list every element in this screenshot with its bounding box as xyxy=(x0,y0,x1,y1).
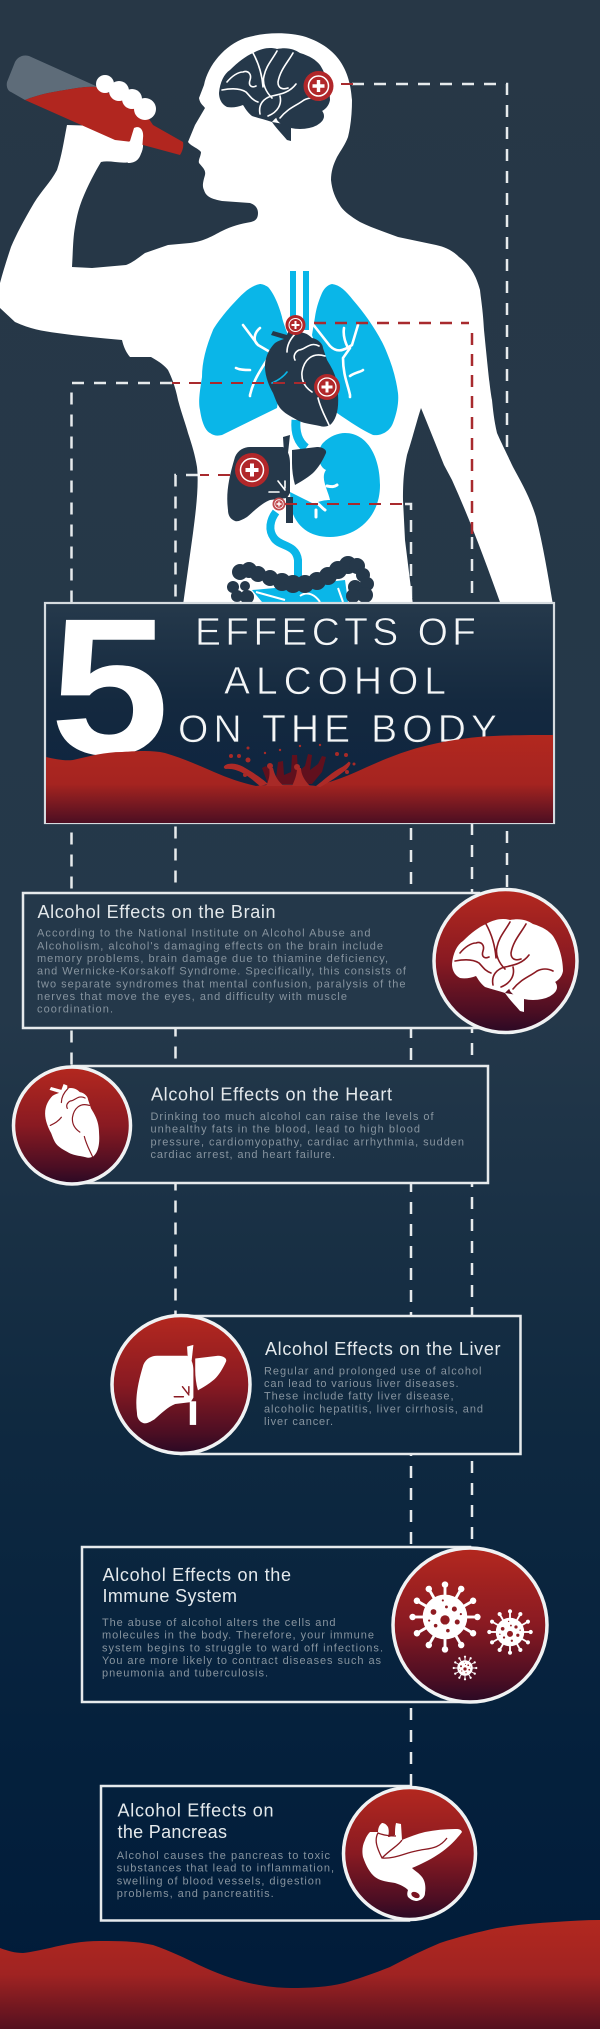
icon: heart xyxy=(14,1067,130,1184)
icon: brain xyxy=(434,890,577,1032)
body text: You are more likely to contract diseases such as xyxy=(102,1655,382,1667)
panel: liver effects xyxy=(112,1316,520,1454)
dashed connector: brain xyxy=(352,84,507,888)
heading xyxy=(118,1801,274,1842)
red connector: brain xyxy=(341,83,353,85)
red connector: pancreas xyxy=(285,503,405,505)
body text: memory problems, brain damage due to thiamine deficiency, xyxy=(37,953,388,965)
body text xyxy=(102,1617,383,1680)
marker: heart lower xyxy=(314,374,340,400)
lung bronchi xyxy=(236,323,363,397)
dashed connector: heart xyxy=(72,383,172,1066)
body text: problems, and pancreatitis. xyxy=(117,1888,274,1900)
body text: nerves that move the eyes, and difficulty with muscle xyxy=(37,991,347,1003)
illustration: person drinking xyxy=(0,33,553,605)
panel: title xyxy=(45,578,554,823)
panel: pancreas effects xyxy=(101,1786,476,1920)
body silhouette xyxy=(0,33,553,605)
body text xyxy=(117,1850,334,1900)
dashed connector: immune system xyxy=(471,537,473,1547)
heading: Alcohol Effects on the Liver xyxy=(265,1339,500,1359)
stomach folds xyxy=(316,485,337,517)
organ: heart xyxy=(265,327,338,427)
panel: immune system effects xyxy=(82,1547,547,1702)
footer red wave xyxy=(0,1920,600,2029)
body text: Alcoholism, alcohol's damaging effects on the brain include xyxy=(37,940,383,952)
small intestine xyxy=(252,580,348,602)
heading line 1: EFFECTS OF xyxy=(195,611,476,654)
body text: substances that lead to inflammation, xyxy=(117,1863,334,1875)
heading: Alcohol Effects on the xyxy=(102,1565,291,1585)
red connector: immune system xyxy=(314,323,472,537)
red connector: heart xyxy=(172,382,306,384)
heading: Alcohol Effects on the Brain xyxy=(38,902,276,922)
body text: pneumonia and tuberculosis. xyxy=(102,1668,268,1680)
body text: The abuse of alcohol alters the cells and xyxy=(102,1617,336,1629)
marker: pancreas xyxy=(272,498,286,510)
body text xyxy=(264,1365,483,1428)
heading xyxy=(102,1565,291,1606)
organ: duodenum xyxy=(270,512,298,582)
hand: thumb xyxy=(118,127,143,163)
body text: Alcohol causes the pancreas to toxic xyxy=(117,1850,330,1862)
marker: heart upper xyxy=(286,315,306,335)
bottle: red liquid xyxy=(25,87,183,155)
body text: two separate syndromes that mental confusion, paralysis of the xyxy=(37,978,406,990)
organ: intestines xyxy=(227,556,374,604)
marker: brain xyxy=(304,71,334,101)
body text: swelling of blood vessels, digestion xyxy=(117,1875,321,1887)
organ: lungs xyxy=(199,271,398,436)
marker: liver xyxy=(235,453,269,487)
red liquid wave xyxy=(46,735,553,823)
heading: Alcohol Effects on xyxy=(118,1801,274,1821)
organ: liver xyxy=(227,435,326,523)
body text: alcoholic hepatitis, liver cirrhosis, and xyxy=(264,1403,483,1415)
colon xyxy=(227,556,374,604)
organ: esophagus xyxy=(296,420,306,448)
bottle: empty glass xyxy=(7,55,98,100)
organ: brain xyxy=(219,48,330,141)
body text: liver cancer. xyxy=(264,1416,333,1428)
heading: Alcohol Effects on the Heart xyxy=(151,1085,392,1105)
icon: liver xyxy=(112,1316,250,1454)
icon: viruses xyxy=(393,1548,547,1702)
body text: cardiac arrest, and heart failure. xyxy=(150,1149,335,1161)
body text: unhealthy fats in the blood, lead to high blood xyxy=(150,1124,420,1136)
heading line 2: ALCOHOL xyxy=(224,660,446,703)
heading: the Pancreas xyxy=(118,1822,227,1842)
dashed connector: liver xyxy=(176,475,198,1314)
panel: brain effects xyxy=(23,890,577,1032)
body text: Regular and prolonged use of alcohol xyxy=(264,1365,482,1377)
body text: coordination. xyxy=(37,1004,113,1016)
body text: Drinking too much alcohol can raise the levels of xyxy=(150,1111,434,1123)
body text xyxy=(37,928,407,1016)
body text: system begins to struggle to ward off infections. xyxy=(102,1642,383,1654)
panel: heart effects xyxy=(14,1066,488,1184)
body text: and Wernicke-Korsakoff Syndrome. Specifically, this consists of xyxy=(37,966,407,978)
body text: pressure, cardiomyopathy, cardiac arrhythmia, sudden xyxy=(150,1136,464,1148)
body text: can lead to various liver diseases. xyxy=(264,1378,458,1390)
hand: fingers xyxy=(96,75,156,120)
body text: According to the National Institute on Alcohol Abuse and xyxy=(37,928,371,940)
organ: stomach xyxy=(290,433,380,537)
dashed connector: pancreas xyxy=(405,504,411,1786)
icon: pancreas xyxy=(344,1788,476,1920)
heading: Immune System xyxy=(102,1586,237,1606)
body text xyxy=(150,1111,464,1161)
heading line 3: ON THE BODY xyxy=(178,708,497,751)
red connector: liver xyxy=(200,474,230,476)
body text: molecules in the body. Therefore, your immune xyxy=(102,1630,374,1642)
big numeral: 5 xyxy=(50,578,169,796)
body text: These include fatty liver disease, xyxy=(264,1391,454,1403)
blood splash xyxy=(224,744,356,787)
